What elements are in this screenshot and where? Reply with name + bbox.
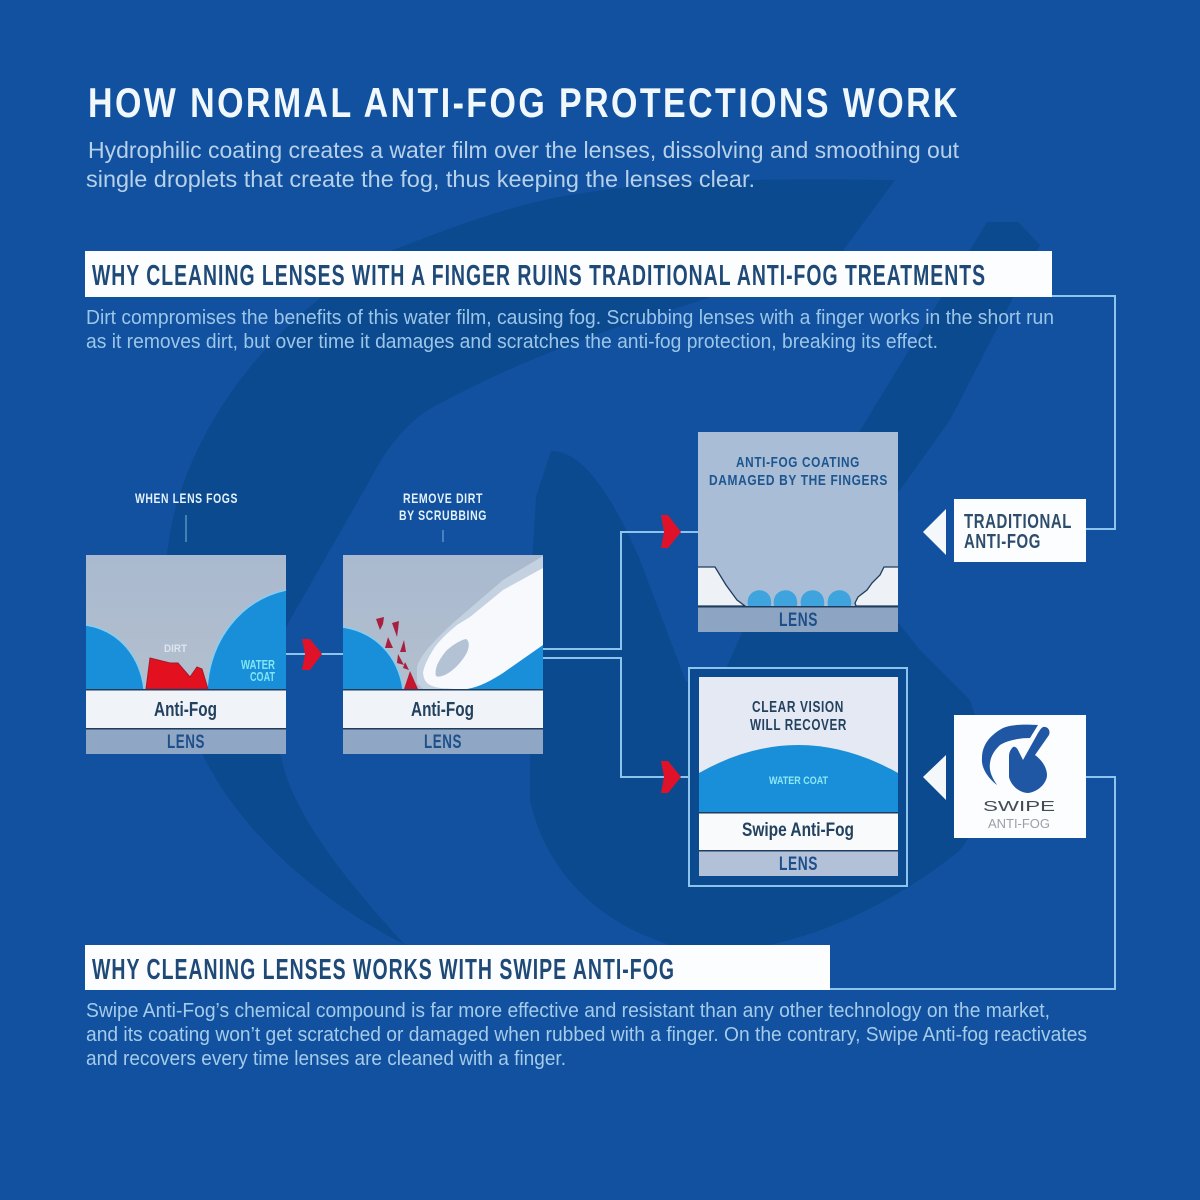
dirt particles [376,617,418,689]
paragraph: why swipe works [86,1000,1087,1070]
lens layer: LENS [424,732,462,753]
swipe anti-fog layer: Swipe Anti-Fog [742,820,854,841]
lens layer [86,728,286,754]
arrow: step one to step two [286,639,343,670]
panel text: CLEAR VISION [752,699,844,716]
watermark: swipe logo [164,179,1040,951]
dirt [146,658,208,689]
lens layer: LENS [779,854,818,875]
dirt label: DIRT [164,643,187,655]
logo hand [1009,727,1050,793]
lens layer [699,850,898,876]
water coat label: WATER COAT [769,775,828,787]
panel: remove dirt by scrubbing [343,555,543,754]
box: traditional anti-fog: TRADITIONAL [964,511,1072,533]
connector: step two to clear vision [543,658,699,777]
panel: clear vision will recover [689,668,907,886]
box: traditional anti-fog: ANTI-FOG [964,531,1041,553]
lens layer: LENS [167,732,205,753]
lens layer [343,728,543,754]
panel text: WILL RECOVER [750,717,847,734]
panel text [709,454,888,489]
lens layer [698,606,898,632]
intro text: Hydrophilic coating creates a water film over the lenses, dissolving and smoothing out [88,137,960,163]
paragraph: why swipe works: Swipe Anti-Fog’s chemical compound is far more effective and resistant than any other technology on the market, [86,1000,1050,1022]
water coat label: COAT [250,670,275,684]
arrow: traditional pointer [923,509,946,555]
connector: step two to damaged coating [543,532,698,649]
logo crescent [982,725,1038,785]
water coat label [241,658,275,684]
anti-fog layer: Anti-Fog [411,699,474,721]
anti-fog layer: Anti-Fog [154,699,217,721]
paragraph: why scrubbing damages: as it removes dirt, but over time it damages and scratches the anti-fog protection, breaking its effect. [86,331,938,353]
connector: swipe box to swipe heading [830,777,1115,989]
connector: traditional heading to traditional box [1052,296,1115,529]
panel: when lens fogs [86,555,286,754]
panel text: ANTI-FOG COATING [736,454,860,471]
water droplets [748,590,851,606]
logo wordmark: SWIPE [983,798,1055,815]
panel text: DAMAGED BY THE FINGERS [709,472,888,489]
anti-fog layer [343,689,543,728]
finger [417,556,543,689]
heading banner: traditional treatments [85,251,1052,297]
anti-fog layer [86,689,286,728]
heading banner: swipe anti-fog: WHY CLEANING LENSES WORKS WITH SWIPE ANTI-FOG [92,954,675,986]
water coat left and right [86,590,286,689]
label: remove dirt by scrubbing: BY SCRUBBING [399,507,487,523]
arrow: to clear vision [661,761,681,793]
heading banner: swipe anti-fog [85,945,830,990]
title: HOW NORMAL ANTI-FOG PROTECTIONS WORK [88,79,960,126]
water coat [343,627,543,689]
damaged coating [698,567,898,606]
panel: anti-fog coating damaged [698,432,898,632]
water coat label: WATER [241,658,275,672]
paragraph: why swipe works: and recovers every time lenses are cleaned with a finger. [86,1048,566,1070]
box: traditional anti-fog [954,499,1086,562]
label: when lens fogs [135,490,238,542]
logo subtitle: ANTI-FOG [988,816,1050,831]
box: swipe anti-fog logo [954,715,1086,838]
label: remove dirt by scrubbing: REMOVE DIRT [403,490,483,506]
paragraph: why scrubbing damages [86,307,1054,353]
panel text [750,699,847,734]
water coat [699,745,898,813]
intro text: single droplets that create the fog, thus keeping the lenses clear. [86,166,755,192]
paragraph: why scrubbing damages: Dirt compromises the benefits of this water film, causing fog. Scrubbing lenses with a finger works in the short run [86,307,1054,329]
arrow: to damaged coating [661,515,681,548]
swipe anti-fog layer [699,812,898,851]
label: remove dirt by scrubbing [399,490,487,542]
arrow: swipe pointer [923,755,946,800]
lens layer: LENS [779,610,818,631]
paragraph: why swipe works: and its coating won’t get scratched or damaged when rubbed with a finger. On the contrary, Swipe Anti-fog reactivates [86,1024,1087,1046]
label: when lens fogs: WHEN LENS FOGS [135,490,238,506]
intro text [86,137,960,192]
